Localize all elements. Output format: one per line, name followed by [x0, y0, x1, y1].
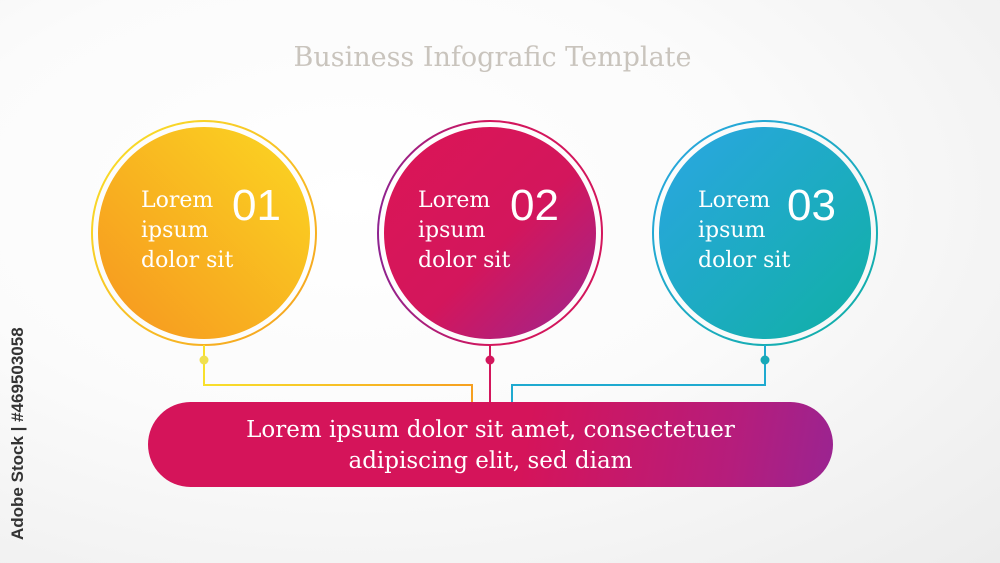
circle 1 text: Lorem: [141, 188, 213, 213]
connector 1: [200, 345, 472, 403]
pill text: [246, 417, 735, 474]
circle 1 number: 01: [232, 181, 281, 230]
circle 1: [92, 121, 316, 345]
circle 2 number: 02: [510, 181, 559, 230]
circle 2 text: [418, 188, 510, 273]
circle 3 text: ipsum: [698, 218, 765, 243]
connector 3: [512, 345, 770, 403]
circle 2 text: dolor sit: [418, 248, 510, 273]
circle 3 text: Lorem: [698, 188, 770, 213]
circle 3 text: dolor sit: [698, 248, 790, 273]
circle 3 number: 03: [787, 181, 836, 230]
circle 1 text: dolor sit: [141, 248, 233, 273]
bottom pill with text: [148, 402, 833, 487]
circle 2: [378, 121, 602, 345]
pill text: Lorem ipsum dolor sit amet, consectetuer: [246, 417, 735, 443]
circle 2 text: ipsum: [418, 218, 485, 243]
pill text: adipiscing elit, sed diam: [348, 448, 632, 474]
circle 1 text: ipsum: [141, 218, 208, 243]
circle 1 text: [141, 188, 234, 273]
connector 2: [486, 345, 494, 403]
circle 3: [653, 121, 877, 345]
title: Business Infografic Template: [293, 42, 692, 73]
watermark text: Adobe Stock | #469503058: [8, 327, 27, 540]
circle 2 text: Lorem: [418, 188, 490, 213]
circle 3 text: [698, 188, 790, 273]
